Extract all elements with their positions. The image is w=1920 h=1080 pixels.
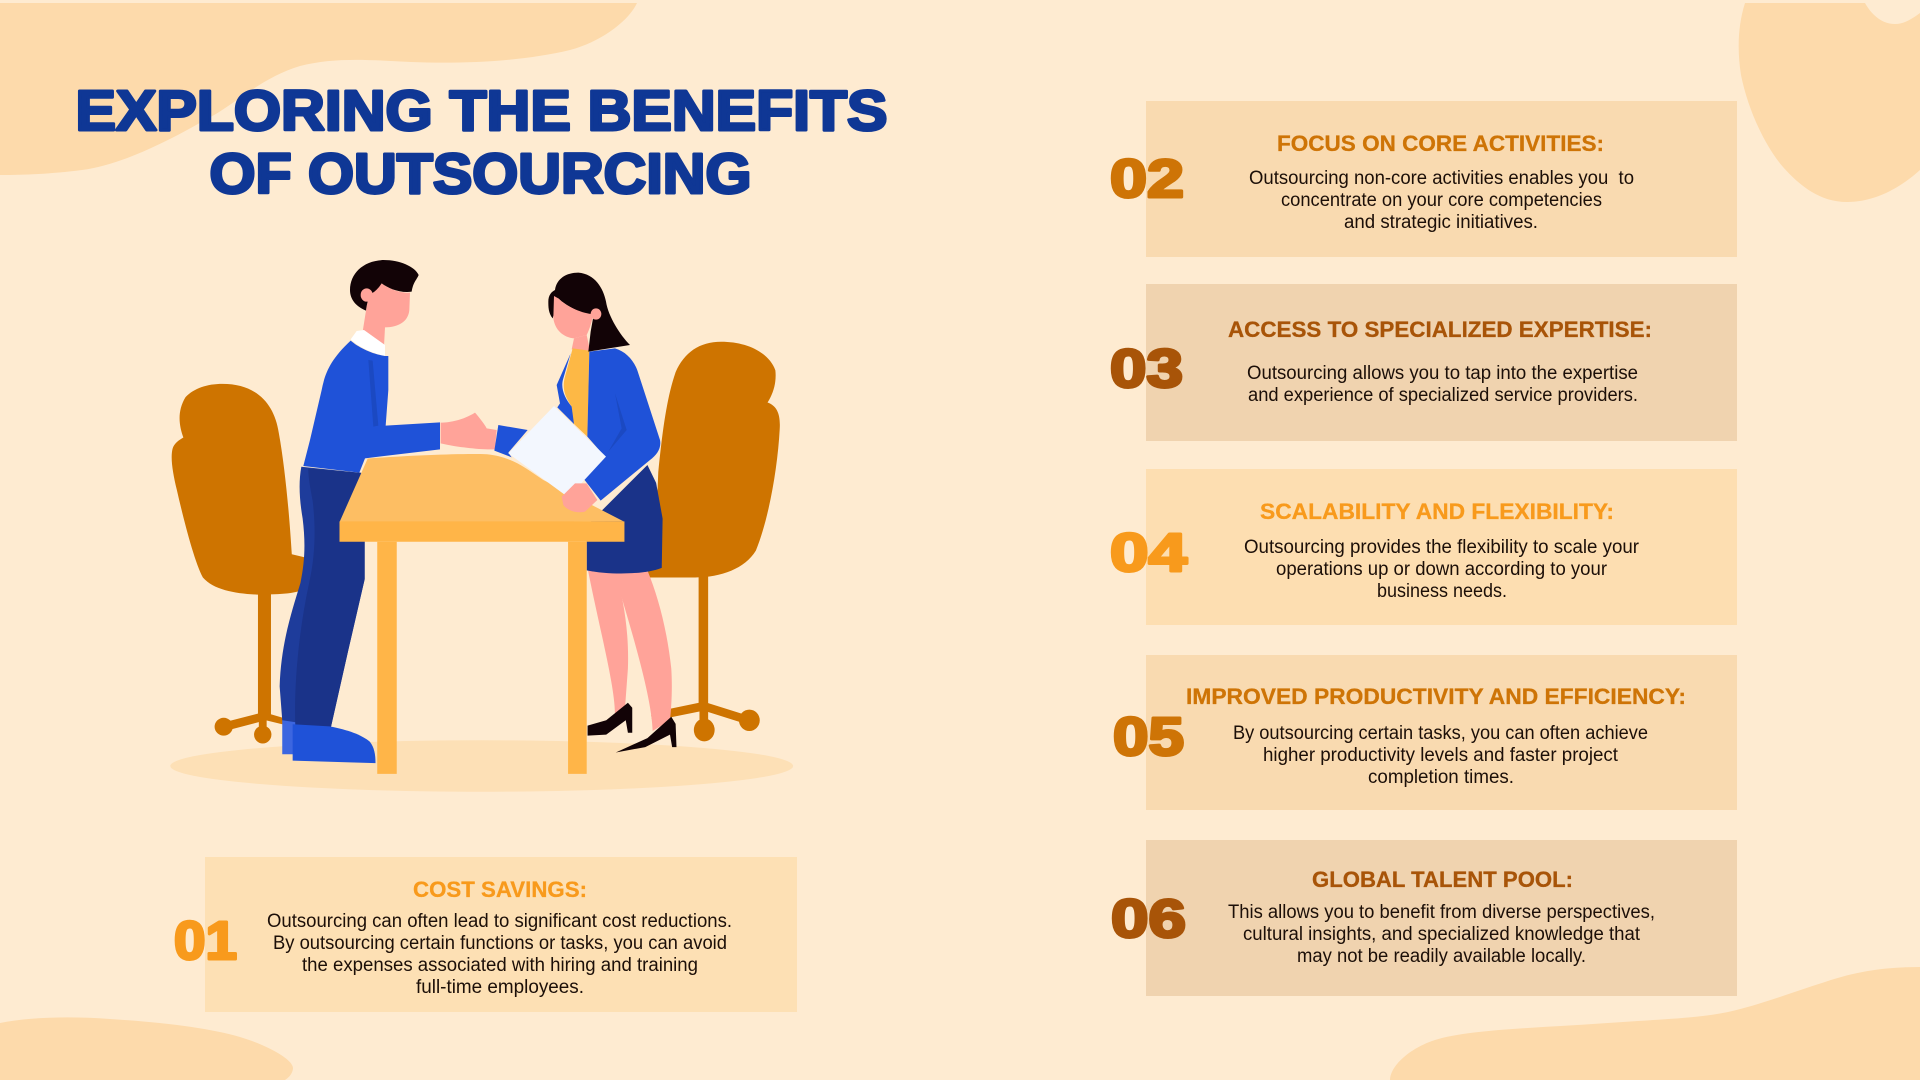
panel 02: focus on core activities [1146, 101, 1737, 257]
number 06: 06 [1111, 889, 1186, 949]
body text 02: and strategic initiatives. [1344, 212, 1538, 233]
number 02: 02 [1110, 149, 1184, 209]
heading 02: FOCUS ON CORE ACTIVITIES: [1277, 131, 1604, 156]
body text 04: operations up or down according to your [1276, 559, 1608, 580]
illustration: business handshake at a table [170, 260, 793, 792]
body text 01: the expenses associated with hiring and training [302, 955, 698, 976]
panel 04: scalability and flexibility [1146, 469, 1737, 625]
body text 06: cultural insights, and specialized knowledge that [1243, 924, 1641, 945]
title: OF OUTSOURCING [210, 142, 752, 206]
body text 06 [1228, 902, 1655, 967]
number 04: 04 [1110, 523, 1187, 583]
number 05: 05 [1113, 707, 1184, 767]
body text 05 [1233, 723, 1648, 788]
title: EXPLORING THE BENEFITS [76, 79, 888, 143]
body text 02 [1249, 168, 1634, 233]
body text 02: concentrate on your core competencies [1281, 190, 1602, 211]
body text 03: and experience of specialized service providers. [1248, 385, 1638, 406]
body text 05: By outsourcing certain tasks, you can often achieve [1233, 723, 1648, 744]
heading 04: SCALABILITY AND FLEXIBILITY: [1260, 499, 1614, 524]
body text 01: Outsourcing can often lead to significant cost reductions. [267, 911, 732, 932]
heading 05: IMPROVED PRODUCTIVITY AND EFFICIENCY: [1186, 684, 1686, 709]
body text 04: Outsourcing provides the flexibility to scale your [1244, 537, 1640, 558]
body text 06: may not be readily available locally. [1297, 946, 1586, 967]
left chair [172, 384, 307, 744]
body text 01 [267, 911, 732, 998]
number 03: 03 [1110, 339, 1183, 399]
title [76, 79, 888, 206]
body text 03 [1247, 363, 1638, 406]
document in hand [508, 406, 606, 512]
body text 03: Outsourcing allows you to tap into the expertise [1247, 363, 1638, 384]
number 01: 01 [174, 911, 237, 971]
heading 03: ACCESS TO SPECIALIZED EXPERTISE: [1228, 317, 1652, 342]
heading 01: COST SAVINGS: [413, 877, 587, 902]
ground shadow [170, 740, 793, 792]
woman [494, 273, 676, 752]
body text 06: This allows you to benefit from diverse perspectives, [1228, 902, 1655, 923]
heading 06: GLOBAL TALENT POOL: [1312, 867, 1573, 892]
body text 01: full-time employees. [416, 977, 584, 998]
panel 03: access to specialized expertise [1146, 284, 1737, 441]
body text 05: completion times. [1368, 767, 1514, 788]
body text 01: By outsourcing certain functions or tasks, you can avoid [273, 933, 727, 954]
panel 06: global talent pool [1146, 840, 1737, 996]
body text 02: Outsourcing non-core activities enables you to [1249, 168, 1634, 189]
body text 04: business needs. [1377, 581, 1507, 602]
panel 05: improved productivity and efficiency [1146, 655, 1737, 810]
body text 04 [1244, 537, 1640, 602]
body text 05: higher productivity levels and faster project [1263, 745, 1619, 766]
panel 01: cost savings [205, 857, 797, 1012]
man [280, 260, 497, 763]
table [340, 454, 624, 774]
right chair [645, 342, 780, 741]
